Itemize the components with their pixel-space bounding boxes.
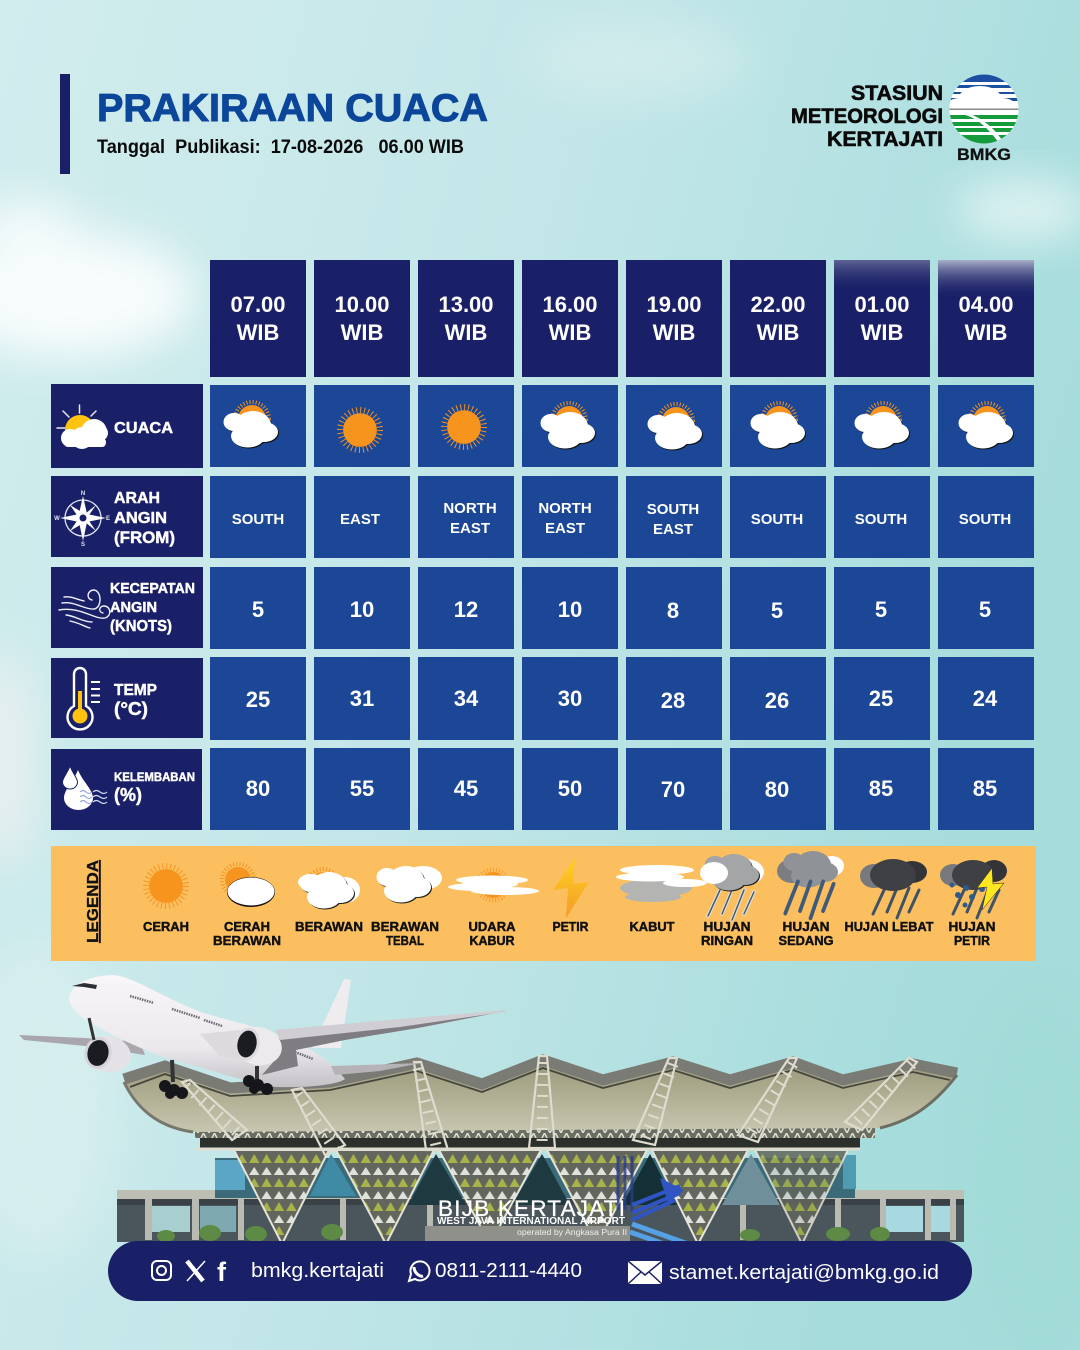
row label: temperatur: TEMP — [114, 682, 157, 699]
row label: arah angin — [51, 476, 203, 557]
sign wall — [425, 1226, 630, 1242]
row: kecepatan angin: 5 — [875, 597, 887, 622]
row: temperatur: 25 — [246, 687, 270, 712]
table header: forecast times: 01.00 — [854, 292, 910, 317]
row label: kecepatan angin: KECEPATAN — [110, 581, 195, 597]
icon: X — [187, 1261, 205, 1281]
row: kelembaban: 80 — [765, 777, 789, 802]
icon: email — [628, 1261, 662, 1284]
legend: petir — [552, 858, 589, 934]
upper truss band — [195, 1127, 875, 1138]
table header: forecast times: 22.00 — [750, 292, 806, 317]
legend: cerah berawan — [213, 864, 281, 948]
row label: kecepatan angin — [51, 567, 203, 648]
landing gear — [89, 1018, 273, 1099]
legend: hujan lebat: HUJAN LEBAT — [844, 919, 934, 934]
glass facade — [200, 1136, 860, 1205]
terminal sign — [437, 1196, 627, 1237]
legend: hujan petir — [940, 860, 1007, 948]
icon: BMKG logo — [948, 74, 1019, 164]
row label: arah angin: S — [81, 542, 85, 548]
legend: hujan sedang: SEDANG — [778, 933, 834, 948]
terminal sign: BIJB KERTAJATI — [438, 1196, 625, 1221]
table header: forecast times: WIB — [445, 320, 487, 345]
row label: arah angin: ARAH — [114, 490, 160, 507]
station name: KERTAJATI — [827, 128, 943, 151]
row label: kecepatan angin: (KNOTS) — [110, 618, 172, 635]
station name — [791, 82, 943, 151]
legend: kabut: KABUT — [630, 919, 675, 934]
airport blue logo — [618, 1156, 688, 1246]
table header: forecast times — [210, 260, 1034, 377]
row label: arah angin: ANGIN — [114, 510, 167, 527]
legend: cerah — [143, 866, 189, 934]
row: temperatur: 24 — [973, 686, 998, 711]
table header: forecast times: 16.00 — [542, 292, 598, 317]
title block: PRAKIRAAN CUACA — [97, 87, 488, 130]
row: arah angin: SOUTH — [855, 511, 907, 528]
row: kelembaban: 85 — [973, 776, 997, 801]
row label: arah angin: (FROM) — [114, 528, 175, 547]
footer contact bar — [108, 1241, 972, 1301]
legend: udara kabur: KABUR — [470, 933, 515, 948]
legend: hujan petir: HUJAN — [948, 919, 996, 934]
row label: kelembaban: KELEMBABAN — [114, 770, 195, 784]
row: temperatur: 28 — [661, 688, 685, 713]
row: arah angin: EAST — [450, 520, 490, 537]
title block — [60, 74, 488, 174]
table header: forecast times: WIB — [757, 320, 799, 345]
row: arah angin: EAST — [340, 511, 380, 528]
table header: forecast times: WIB — [965, 320, 1007, 345]
triangular patterned panels — [234, 1150, 848, 1244]
legend: udara kabur: UDARA — [468, 919, 516, 934]
row: kecepatan angin: 12 — [454, 597, 478, 622]
row label: arah angin: W — [54, 516, 60, 522]
legend: cerah berawan: BERAWAN — [213, 933, 281, 948]
legend: berawan: BERAWAN — [295, 919, 363, 934]
row: arah angin: SOUTH — [959, 511, 1011, 528]
tail fin — [312, 979, 351, 1048]
row: kecepatan angin: 10 — [558, 597, 582, 622]
row: temperatur: 34 — [454, 686, 479, 711]
far wing — [19, 1035, 145, 1055]
table header: forecast times: WIB — [549, 320, 591, 345]
row: arah angin: NORTH — [538, 500, 592, 517]
legend: hujan ringan: HUJAN — [704, 919, 750, 934]
row: kecepatan angin: 5 — [771, 598, 783, 623]
airport terminal photo — [117, 1056, 964, 1246]
legend: cerah berawan: CERAH — [224, 919, 270, 934]
engine: near — [231, 1022, 285, 1070]
title block: Tanggal Publikasi: 17-08-2026 06.00 WIB — [97, 137, 464, 158]
row: temperatur: 26 — [765, 688, 789, 713]
row label: kecepatan angin: ANGIN — [110, 600, 157, 616]
row label: kelembaban — [51, 749, 202, 830]
airplane — [19, 975, 506, 1099]
icon: instagram — [152, 1261, 171, 1280]
legend panel — [51, 846, 1036, 961]
row label: kelembaban: (%) — [114, 785, 142, 805]
legend: hujan petir: PETIR — [954, 933, 991, 948]
row: kelembaban: 45 — [454, 776, 478, 801]
station name: METEOROLOGI — [791, 105, 943, 128]
legend: berawan tebal: BERAWAN — [371, 919, 439, 934]
legend: berawan — [295, 869, 363, 934]
row: arah angin: SOUTH — [232, 511, 284, 528]
legend: hujan sedang: HUJAN — [782, 919, 830, 934]
table header: forecast times: 13.00 — [438, 292, 494, 317]
legend: petir: PETIR — [552, 919, 589, 934]
email address: stamet.kertajati@bmkg.go.id — [669, 1262, 939, 1284]
row label: cuaca: CUACA — [114, 420, 173, 437]
row: temperatur — [51, 657, 1034, 740]
row: arah angin: EAST — [653, 521, 693, 538]
legend: cerah: CERAH — [143, 919, 189, 934]
table header: forecast times: WIB — [653, 320, 695, 345]
row label: temperatur — [51, 658, 203, 738]
legend: hujan sedang — [777, 851, 844, 948]
table header: forecast times: 19.00 — [646, 292, 702, 317]
row label: temperatur: (°C) — [114, 699, 148, 719]
row label: arah angin: N — [81, 491, 85, 497]
phone number: 0811-2111-4440 — [435, 1260, 582, 1282]
row: kecepatan angin: 5 — [979, 597, 991, 622]
legend: berawan tebal — [371, 866, 442, 948]
row: kelembaban: 80 — [246, 776, 270, 801]
row: kecepatan angin — [51, 567, 1034, 649]
roof truss columns — [182, 1056, 917, 1155]
row: kelembaban: 55 — [350, 776, 374, 801]
fuselage — [69, 975, 345, 1087]
row: temperatur: 25 — [869, 686, 893, 711]
legend: hujan lebat — [844, 859, 934, 934]
row: arah angin — [51, 476, 1034, 558]
terminal sign: operated by Angkasa Pura II — [517, 1228, 627, 1237]
legend: kabut — [616, 865, 707, 934]
stabilizer — [331, 1063, 422, 1075]
row: kelembaban: 70 — [661, 777, 685, 802]
table header: forecast times: WIB — [237, 320, 279, 345]
legend: udara kabur — [448, 870, 539, 948]
legend: hujan ringan — [700, 854, 764, 948]
icon: whatsapp — [409, 1261, 429, 1281]
cabin windows — [130, 996, 313, 1059]
row: arah angin: SOUTH — [751, 511, 803, 528]
icon: BMKG logo: BMKG — [957, 145, 1011, 164]
station name: STASIUN — [851, 82, 943, 105]
row: arah angin: SOUTH — [647, 501, 699, 518]
roof fascia — [124, 1060, 957, 1088]
legend heading: LEGENDA — [85, 860, 102, 943]
table header: forecast times: 10.00 — [334, 292, 390, 317]
row: temperatur: 31 — [350, 686, 374, 711]
roof soffit — [124, 1060, 957, 1132]
row: kelembaban — [51, 748, 1034, 830]
row: kecepatan angin: 5 — [252, 597, 264, 622]
table header: forecast times: WIB — [861, 320, 903, 345]
social handle: bmkg.kertajati — [251, 1260, 384, 1282]
row: kelembaban: 50 — [558, 776, 582, 801]
icon: facebook: f — [217, 1257, 227, 1287]
legend: hujan ringan: RINGAN — [701, 933, 753, 948]
row: arah angin: EAST — [545, 520, 585, 537]
ground and lower portico — [117, 1190, 964, 1242]
row: kecepatan angin: 10 — [350, 597, 374, 622]
legend: berawan tebal: TEBAL — [386, 933, 424, 948]
row label: cuaca — [51, 384, 203, 468]
row: kecepatan angin: 8 — [667, 598, 679, 623]
row label: arah angin: E — [106, 516, 110, 522]
table header: forecast times: 07.00 — [230, 292, 286, 317]
cockpit windows — [72, 983, 97, 989]
terminal sign: WEST JAVA INTERNATIONAL AIRPORT — [437, 1216, 625, 1227]
row: temperatur: 30 — [558, 686, 582, 711]
table header: forecast times: WIB — [341, 320, 383, 345]
row: kelembaban: 85 — [869, 776, 893, 801]
row: arah angin: NORTH — [443, 500, 497, 517]
engine: far — [82, 1032, 134, 1076]
row: cuaca — [51, 384, 1034, 468]
table header: forecast times: 04.00 — [958, 292, 1014, 317]
main wing — [200, 1010, 506, 1075]
